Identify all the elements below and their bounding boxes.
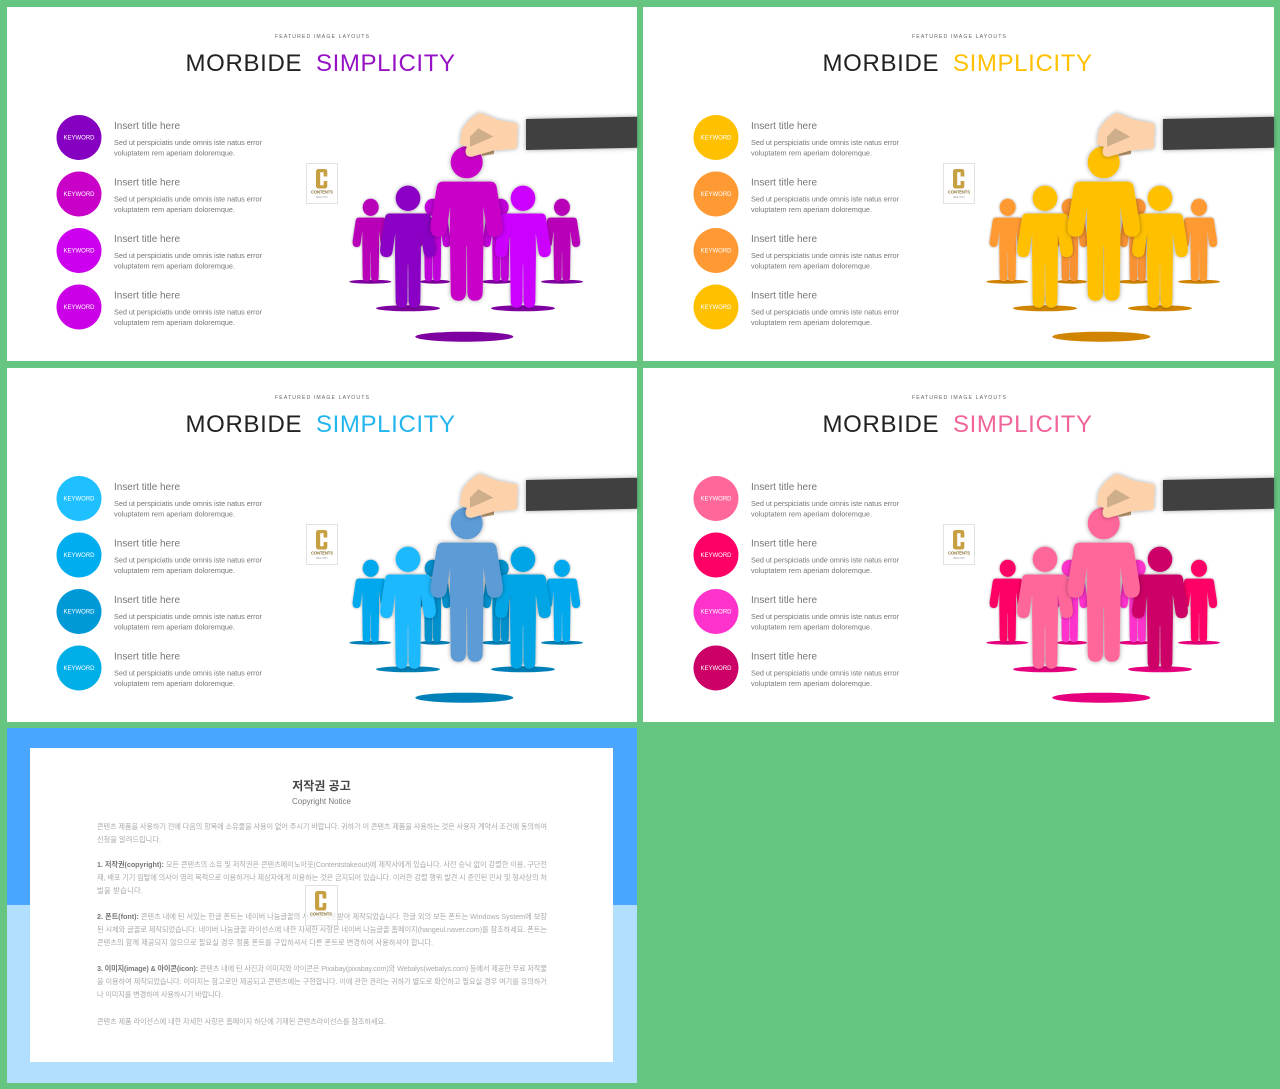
logo: REAL COPY <box>316 556 328 560</box>
heading <box>822 411 1092 438</box>
keyword item 4: KEYWORD <box>63 305 95 311</box>
keyword item 1: Insert title here <box>114 121 180 132</box>
keyword item 4: voluptatem rem aperiam doloremque. <box>751 318 872 327</box>
keyword item 1: Insert title here <box>114 482 180 493</box>
section 1: copyright: 1. 저작권(copyright): 모든 콘텐츠의 소유 및 저작권은 콘텐츠메이노아웃(Contentstakeout)에 제작사에게 있습니다. 사전 승낙 없이 강렬한 이용, 구단전 <box>97 860 547 869</box>
keyword item 1: voluptatem rem aperiam doloremque. <box>751 149 872 158</box>
keyword item 2: Insert title here <box>114 538 180 550</box>
logo: REAL COPY <box>953 556 965 560</box>
section 3: image and icon: 을 이용하여 제작되었습니다. 이미지는 참고로만 제공되고 콘텐츠에는 구현합니다. 이에 관한 권리는 귀하가 별도로 확인하고 필요실 경우 여기를 유의하거 <box>97 977 547 986</box>
heading <box>186 50 455 77</box>
section 1: copyright: 재, 배포 기기 임탈에 의사이 영리 목적으로 이용하거나 제삼자에게 이용하는 것은 금지되어 있습니다. 이러한 강렬 행위 발견 시 준인된 민사 및 형사상의 처 <box>97 873 547 882</box>
logo <box>944 164 974 204</box>
logo <box>306 886 338 926</box>
keyword item 4: Sed ut perspiciatis unde omnis iste natus error <box>114 308 263 316</box>
panel: blue slide <box>7 368 637 722</box>
keyword item 1: KEYWORD <box>700 496 732 502</box>
keyword item 1: Insert title here <box>751 482 817 493</box>
keyword item 2 <box>56 172 263 216</box>
panel: purple slide <box>7 7 637 361</box>
keyword item 4: Insert title here <box>114 652 180 662</box>
keyword item 2: voluptatem rem aperiam doloremque. <box>114 205 235 214</box>
eyebrow label: FEATURED IMAGE LAYOUTS <box>275 395 370 401</box>
heading: SIMPLICITY <box>953 50 1092 77</box>
eyebrow label: FEATURED IMAGE LAYOUTS <box>275 34 370 40</box>
keyword item 1: voluptatem rem aperiam doloremque. <box>114 510 235 519</box>
keyword item 2 <box>694 172 900 216</box>
keyword item 1: Sed ut perspiciatis unde omnis iste natus error <box>751 138 900 147</box>
keyword item 3: KEYWORD <box>63 248 95 254</box>
logo: CONTENTS <box>311 550 333 556</box>
section 2: font: 2. 폰트(font): 콘텐츠 내에 틴 서있는 한글 폰트는 네이버 나눔글꼴의 서체를 다운받아 제작되었습니다. 한글 외의 보든 폰트는 Windows System에 보장 <box>97 912 547 921</box>
section 1: copyright: 벌을 받습니다. <box>97 886 143 895</box>
section 3: image and icon: 나 이미지를 변경하여 사용하시기 바랍니다. <box>97 990 223 999</box>
heading: SIMPLICITY <box>316 50 455 77</box>
logo: CONTENTS <box>948 550 970 556</box>
illustration: people and hand <box>349 474 637 703</box>
section 1: copyright <box>97 860 547 895</box>
keyword item 4: Insert title here <box>751 652 817 662</box>
heading: MORBIDE <box>186 411 302 438</box>
keyword item 2: Insert title here <box>751 178 817 188</box>
section 2: font <box>97 912 547 947</box>
keyword item 4 <box>694 284 900 330</box>
keyword item 3 <box>56 589 263 634</box>
keyword item 2 <box>56 532 263 578</box>
heading: MORBIDE <box>186 50 302 77</box>
eyebrow label: FEATURED IMAGE LAYOUTS <box>912 395 1007 401</box>
keyword item 4 <box>56 646 263 690</box>
eyebrow label: FEATURED IMAGE LAYOUTS <box>912 34 1007 40</box>
keyword item 3: Sed ut perspiciatis unde omnis iste natus error <box>114 251 263 260</box>
keyword item 2: voluptatem rem aperiam doloremque. <box>751 205 872 214</box>
illustration: people and hand <box>986 113 1274 342</box>
keyword item 1: Insert title here <box>751 121 817 132</box>
logo: REAL COPY <box>953 195 965 199</box>
keyword item 4: KEYWORD <box>63 666 95 672</box>
section 3: image and icon <box>97 964 547 999</box>
keyword item 3: KEYWORD <box>700 248 732 254</box>
keyword item 1 <box>694 115 900 160</box>
keyword item 3: Insert title here <box>114 595 180 606</box>
section 2: font: 된 시체와 글꼴로 제작되었습니다. 네이버 나눔글꼴 라이선스에 내한 자세한 사항은 네이버 나눔글꼴 홈페이지(hangeul.naver.com)를 참조하세요. 폰트는 <box>97 925 547 934</box>
keyword item 2: voluptatem rem aperiam doloremque. <box>751 566 872 575</box>
keyword item 1 <box>56 115 263 160</box>
logo: CONTENTS <box>310 912 332 916</box>
illustration: people and hand <box>986 474 1274 703</box>
keyword item 4: voluptatem rem aperiam doloremque. <box>751 679 872 688</box>
keyword item 1 <box>56 476 263 521</box>
keyword item 1: voluptatem rem aperiam doloremque. <box>751 510 872 519</box>
panel: pink slide <box>643 368 1274 722</box>
keyword item 4: voluptatem rem aperiam doloremque. <box>114 679 235 688</box>
keyword item 3: voluptatem rem aperiam doloremque. <box>114 262 235 271</box>
closing note: 콘텐츠 제품 라이선스에 내한 자세한 사항은 홈페이지 하단에 기재된 콘텐츠라이선스를 참조하세요. <box>97 1017 386 1026</box>
keyword item 3: Sed ut perspiciatis unde omnis iste natus error <box>751 251 900 260</box>
keyword item 2: voluptatem rem aperiam doloremque. <box>114 566 235 575</box>
keyword item 4: Insert title here <box>751 290 817 302</box>
keyword item 2: Insert title here <box>751 538 817 550</box>
keyword item 2: Sed ut perspiciatis unde omnis iste natus error <box>114 556 263 564</box>
keyword item 4: voluptatem rem aperiam doloremque. <box>114 318 235 327</box>
keyword item 3: KEYWORD <box>700 610 732 616</box>
keyword item 1 <box>694 476 900 521</box>
keyword item 4: Sed ut perspiciatis unde omnis iste natus error <box>751 308 900 316</box>
keyword item 2: KEYWORD <box>63 553 95 559</box>
keyword item 3: KEYWORD <box>63 610 95 616</box>
logo <box>306 524 338 564</box>
logo: CONTENTS <box>311 190 333 194</box>
heading <box>186 411 455 438</box>
keyword item 1: Sed ut perspiciatis unde omnis iste natus error <box>751 499 900 508</box>
keyword item 1: Sed ut perspiciatis unde omnis iste natus error <box>114 499 263 508</box>
copyright title: 저작권 공고 <box>292 778 351 793</box>
keyword item 4: Sed ut perspiciatis unde omnis iste natus error <box>114 668 263 678</box>
keyword item 3: Insert title here <box>114 234 180 245</box>
keyword item 1: KEYWORD <box>700 136 732 142</box>
heading: SIMPLICITY <box>953 411 1092 438</box>
copyright subtitle: Copyright Notice <box>292 797 352 806</box>
logo: REAL COPY <box>316 195 328 199</box>
keyword item 3: Insert title here <box>751 234 817 245</box>
heading: MORBIDE <box>822 411 938 438</box>
section 2: font: 콘텐츠의 함께 제공되지 않으므로 필요실 경우 정품 폰트를 구입하셔서 다른 폰트로 변경하여 사용하셔야 합니다. <box>97 938 433 947</box>
keyword item 1: KEYWORD <box>63 136 95 142</box>
logo <box>944 524 974 564</box>
heading: SIMPLICITY <box>316 411 455 438</box>
keyword item 1: voluptatem rem aperiam doloremque. <box>114 149 235 158</box>
keyword item 2: KEYWORD <box>63 192 95 198</box>
logo <box>306 164 338 204</box>
keyword item 2: Sed ut perspiciatis unde omnis iste natus error <box>751 556 900 564</box>
keyword item 4: KEYWORD <box>700 666 732 672</box>
logo: CONTENTS <box>948 190 970 194</box>
keyword item 3 <box>56 228 263 273</box>
keyword item 3: voluptatem rem aperiam doloremque. <box>751 262 872 271</box>
keyword item 3 <box>694 589 900 634</box>
keyword item 4: KEYWORD <box>700 305 732 311</box>
keyword item 1: Sed ut perspiciatis unde omnis iste natus error <box>114 138 263 147</box>
keyword item 1: KEYWORD <box>63 496 95 502</box>
illustration: people and hand <box>349 113 637 342</box>
keyword item 4: Insert title here <box>114 290 180 302</box>
keyword item 2: Sed ut perspiciatis unde omnis iste natus error <box>114 194 263 204</box>
keyword item 3: Sed ut perspiciatis unde omnis iste natus error <box>751 612 900 621</box>
keyword item 2: KEYWORD <box>700 192 732 198</box>
keyword item 3: Sed ut perspiciatis unde omnis iste natus error <box>114 612 263 621</box>
keyword item 2: KEYWORD <box>700 553 732 559</box>
heading <box>822 50 1092 77</box>
keyword item 2 <box>694 532 900 578</box>
section 3: image and icon: 3. 이미지(image) & 아이콘(icon): 콘텐츠 내에 틴 사진과 이미지와 아이콘은 Pixabay(pixabay.com)와 Webalys(webalys.com) 등에서 제공한 무료 저작물 <box>97 964 547 973</box>
intro paragraph: 콘텐츠 제품을 사용하기 전에 다음의 항목에 소유물을 사용이 없어 주시기 바랍니다. 귀하가 이 콘텐츠 제품을 사용하는 것은 사용자 계약서 조건에 동의하여 <box>97 822 547 831</box>
intro paragraph <box>97 822 547 844</box>
keyword item 3: voluptatem rem aperiam doloremque. <box>114 623 235 632</box>
keyword item 3 <box>694 228 900 273</box>
keyword item 4: Sed ut perspiciatis unde omnis iste natus error <box>751 668 900 678</box>
keyword item 2: Insert title here <box>114 178 180 188</box>
keyword item 3: voluptatem rem aperiam doloremque. <box>751 623 872 632</box>
keyword item 3: Insert title here <box>751 595 817 606</box>
intro paragraph: 신청을 알려드립니다. <box>97 835 161 844</box>
panel: copyright notice <box>7 728 637 1083</box>
panel: amber slide <box>643 7 1274 361</box>
heading: MORBIDE <box>822 50 938 77</box>
keyword item 2: Sed ut perspiciatis unde omnis iste natus error <box>751 194 900 204</box>
keyword item 4 <box>56 284 263 330</box>
keyword item 4 <box>694 646 900 690</box>
